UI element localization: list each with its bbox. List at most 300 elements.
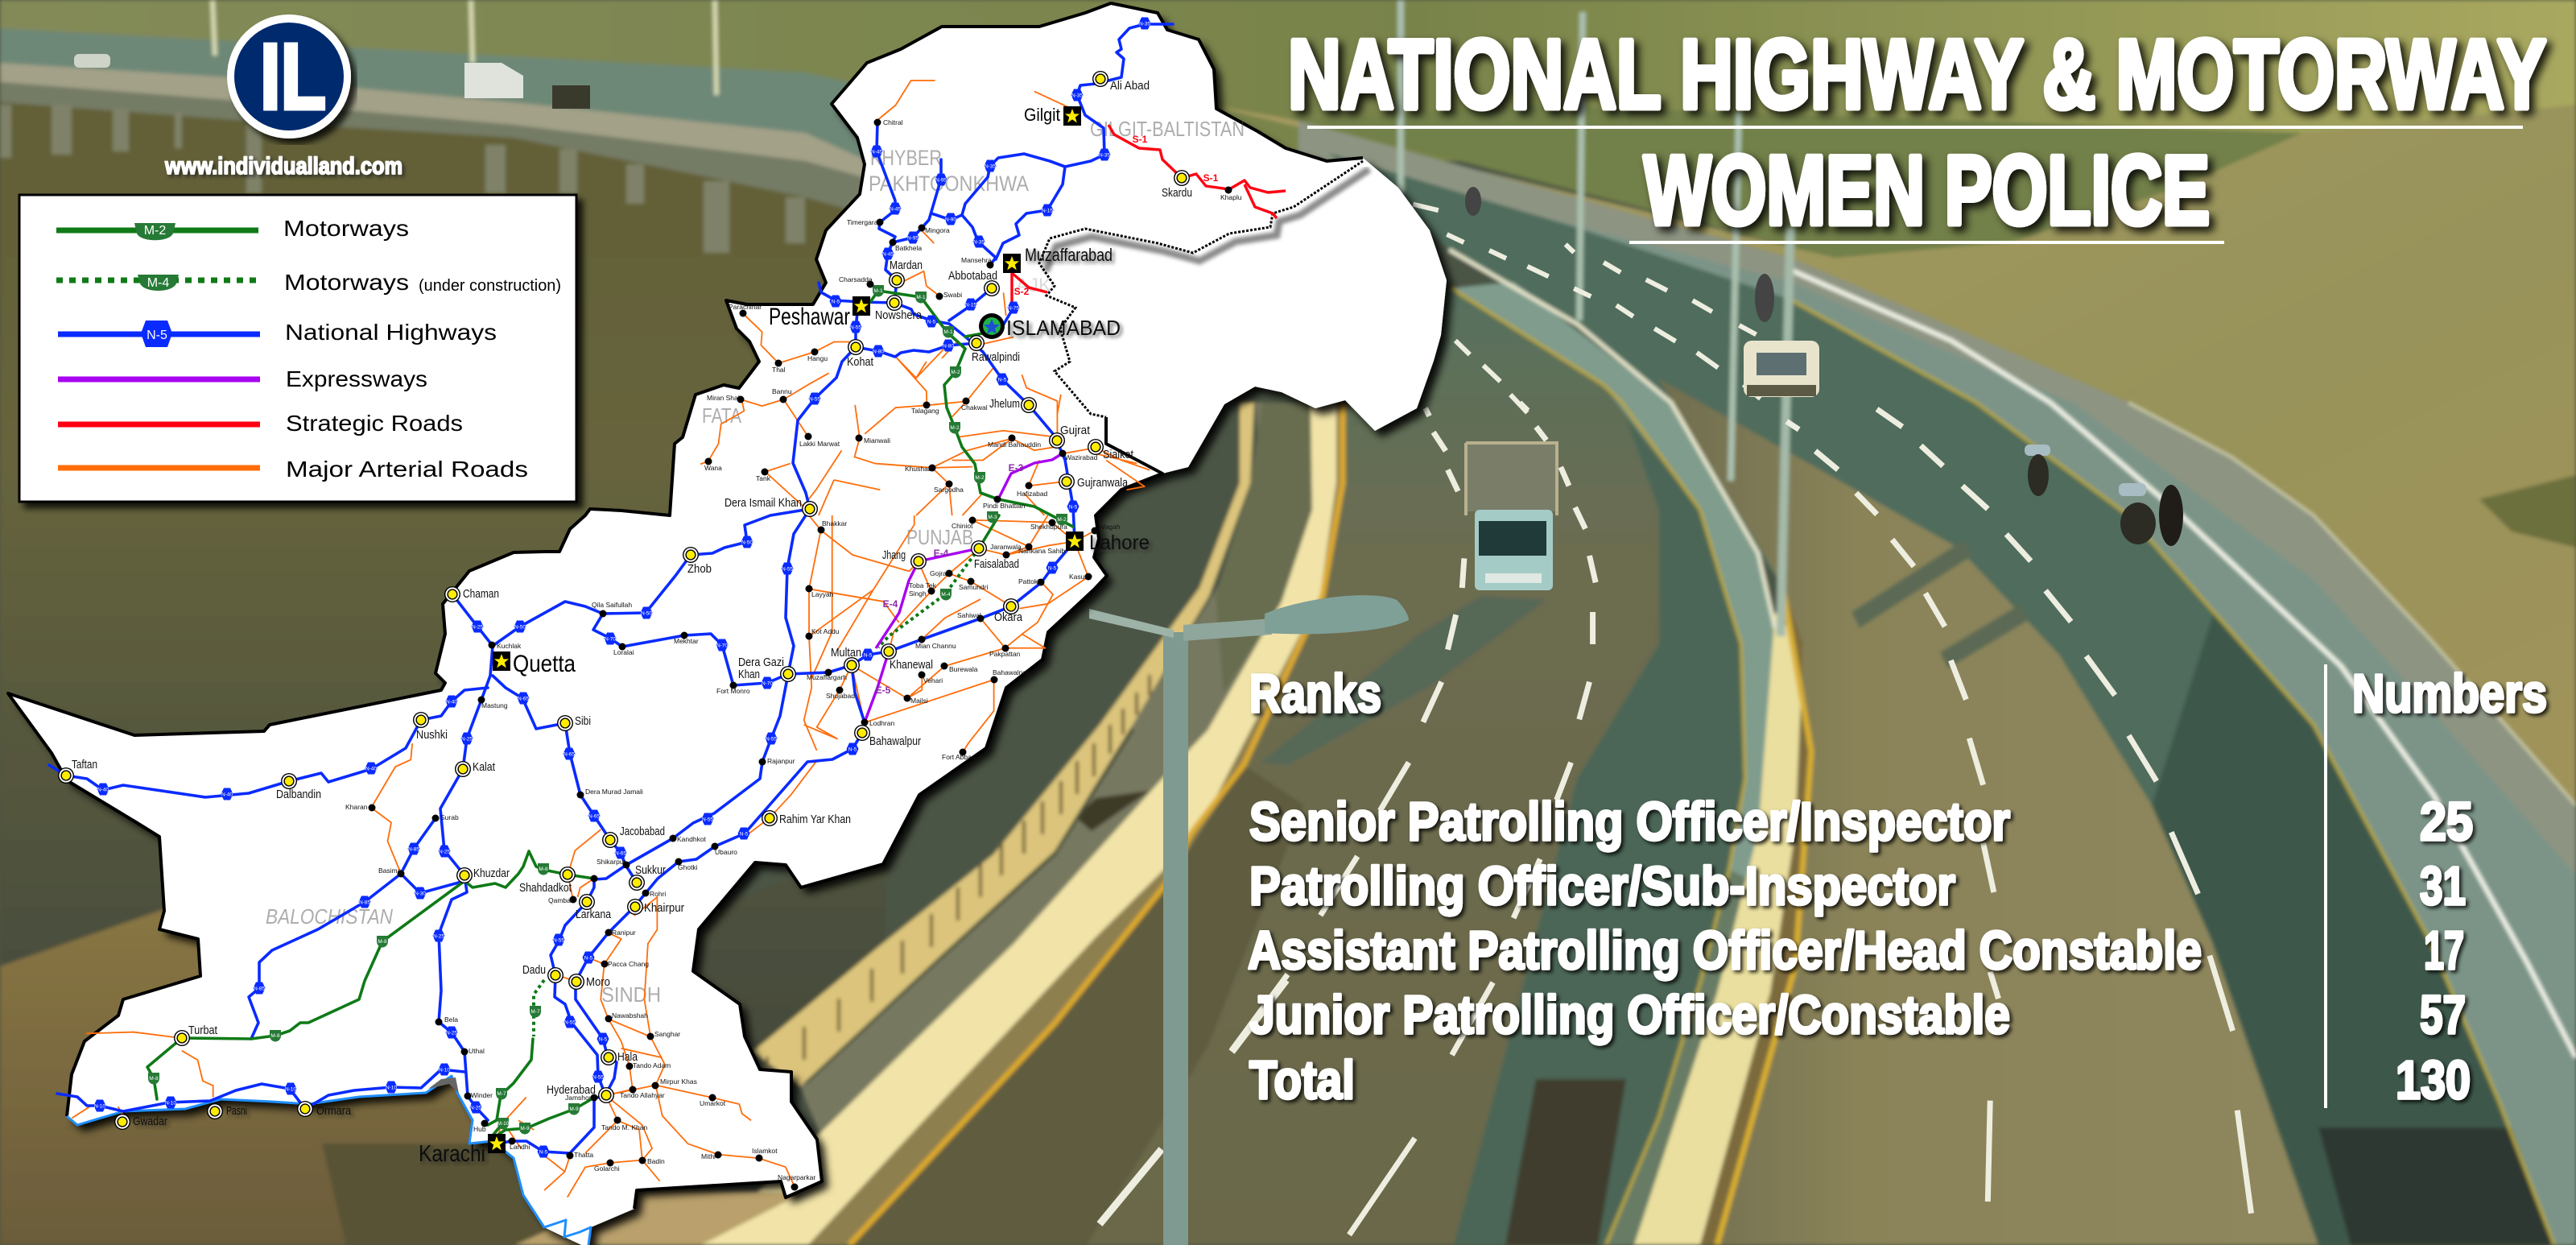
route shields: national highways: N-25 (439, 849, 450, 855)
route shields: motorways: M-9 (569, 1106, 579, 1112)
route shields: motorways: M-9 (520, 1126, 530, 1131)
route shields: motorways: M-2 (950, 425, 960, 431)
route shields: national highways: N-25 (433, 934, 444, 939)
map landmass (8, 3, 1447, 1245)
route shields: national highways: N-15 (965, 303, 976, 308)
small town labels: Tando Adam (633, 1061, 671, 1069)
city labels: Gujrat (1060, 424, 1091, 437)
shaded side of left carriageway (1454, 419, 1745, 1245)
city labels: Rahim Yar Khan (779, 813, 851, 826)
route shields: national highways: N-10 (94, 1103, 105, 1110)
region names: GILGIT-BALTISTAN (1090, 117, 1245, 141)
city labels: Khuzdar (473, 867, 510, 880)
route shields: national highways: N-40 (365, 767, 377, 771)
table rows: numbers: 31 (2420, 856, 2466, 916)
small town labels: Hub (473, 1125, 486, 1133)
route shields: national highways: N-85 (254, 986, 265, 992)
route shields: national highways: N-5 (584, 955, 593, 962)
city labels: Ali Abad (1110, 79, 1150, 93)
region names (266, 117, 1245, 1007)
small town labels: Basima (378, 867, 402, 875)
city labels: Bahawalpur (869, 734, 921, 748)
table rows: ranks (1248, 792, 2202, 1111)
city labels: Abbotabad (948, 269, 997, 283)
route shields: national highways: N-70 (762, 681, 773, 686)
small town labels: Mansehra (961, 256, 992, 264)
route shields: national highways: N-5 (539, 1150, 548, 1155)
legend: strategic roads: Strategic Roads (286, 411, 463, 436)
route shields: national highways: N-50 (514, 625, 526, 630)
sunlit lane (1658, 378, 2318, 1245)
legend: national highways: National Highways (285, 320, 497, 345)
small town labels: Mirpur Khas (660, 1077, 697, 1086)
route shields: national highways: N-65 (518, 696, 529, 702)
map border (8, 3, 1363, 1209)
route shields: national highways: N-5 (599, 1037, 608, 1042)
lower left brown ground (0, 886, 692, 1245)
small town dots (369, 119, 1232, 1190)
route shields: motorways: M-7 (530, 1009, 540, 1015)
city labels: Chaman (463, 587, 499, 601)
route shields: national highways: N-5 (848, 747, 857, 752)
Islamabad marker (979, 313, 1005, 339)
region names: SINDH (601, 982, 661, 1007)
shadowed city labels: Lahore (1089, 532, 1150, 554)
small town labels: Pakpattan (989, 650, 1021, 658)
table rows: ranks: Senior Patrolling Officer/Inspector (1249, 792, 2010, 852)
car (1744, 341, 1819, 397)
route shields: national highways: N-25 (470, 1105, 481, 1111)
dark shaded lane (2152, 612, 2554, 1245)
large city labels: Peshawar (769, 304, 850, 330)
central median (1451, 282, 1782, 886)
region names: FATA (702, 403, 742, 428)
route labels: strategic roads and expressways: S-1 (1203, 172, 1219, 184)
route shields: national highways: N-10 (439, 1068, 450, 1073)
small town labels: Lakki Marwat (799, 440, 840, 448)
small town labels: Hafizabad (1017, 490, 1048, 498)
city labels: Mardan (890, 259, 923, 272)
small town labels: Chiniot (952, 522, 973, 530)
route shields: national highways: N-5 (1069, 504, 1078, 511)
small town labels: Talagang (911, 407, 939, 415)
gulf inlet (428, 1077, 459, 1094)
table rows: ranks: Patrolling Officer/Sub-Inspector (1249, 856, 1955, 916)
small town labels: Tando Allahyar (620, 1091, 665, 1099)
motorways (147, 291, 1073, 1135)
city labels: Jacobabad (620, 825, 665, 838)
small town labels: Tando M. Khan (601, 1123, 647, 1131)
small town labels: Chitral (883, 118, 903, 126)
posted barrier (753, 403, 1254, 1086)
route shields: national highways: N-5 (740, 831, 749, 838)
route shields: national highways: N-90 (945, 217, 956, 222)
city labels: Multan (831, 646, 861, 660)
small town labels: Jamshoro (565, 1094, 596, 1102)
small town labels: Qambar (548, 896, 573, 904)
top right tan hillside (1208, 105, 2576, 805)
shadowed city labels: ISLAMABAD (1006, 316, 1121, 340)
small town labels: Ranipur (612, 929, 636, 937)
route shields: national highways: N-65 (588, 813, 600, 820)
small town labels: Kot Addu (811, 627, 840, 635)
left: olive ground below flyover (0, 81, 886, 1047)
small town labels: Toba Tek (909, 581, 937, 589)
legend: expressways: Expressways (286, 366, 427, 391)
route shields: national highways: N-25 (446, 1031, 457, 1036)
small town labels: Kuchlak (497, 642, 522, 650)
outer fence (1298, 121, 2576, 875)
legend: motorways: M-2 (144, 224, 166, 238)
strategic roads (1012, 125, 1286, 308)
route shields: national highways: N-80 (943, 343, 954, 350)
flyover deck (0, 82, 877, 217)
city labels: Sukkur (635, 863, 666, 877)
small town labels: Vehari (923, 676, 943, 685)
small town labels: Mian Channu (915, 642, 956, 650)
small town labels: Khaplu (1220, 193, 1242, 201)
dotted line of control (1039, 161, 1363, 417)
small town labels: Rajanpur (767, 757, 795, 765)
arterial roads (72, 81, 1150, 1197)
table: ranks and numbers (1248, 664, 2547, 1111)
route shields: national highways: N-55 (850, 325, 861, 330)
small town labels: Samundri (959, 583, 988, 591)
small town labels: Surab (440, 813, 459, 821)
route shields: national highways: N-5 (832, 300, 840, 304)
small town labels: Landhi (510, 1143, 530, 1151)
route shields: national highways: N-10 (386, 1086, 397, 1090)
route shields: national highways: N-50 (641, 610, 652, 617)
table rows: ranks: Assistant Patrolling Officer/Head Constable (1248, 920, 2202, 981)
route shields: national highways: N-35 (1099, 153, 1110, 158)
coastline (67, 1076, 591, 1245)
route shields: motorways: M-1 (916, 295, 926, 300)
city labels: Khairpur (644, 901, 684, 915)
route shields: national highways: N-10 (165, 1100, 176, 1106)
city labels: Okara (994, 610, 1023, 624)
small town labels: Bannu (772, 387, 792, 395)
route shields: national highways: N-35 (1071, 93, 1083, 98)
city labels: Hyderabad (547, 1083, 596, 1097)
route labels: strategic roads and expressways: E-4 (934, 548, 949, 559)
small town labels: Wana (704, 464, 722, 472)
region names: AJK (1016, 275, 1051, 296)
motorcyclists (1465, 187, 2183, 546)
provincial capital markers (488, 106, 1084, 1153)
small town labels: Wazirabad (1065, 453, 1098, 461)
route shields: national highways: N-70 (605, 636, 616, 643)
route labels: strategic roads and expressways: E-4 (883, 598, 898, 610)
table rows: numbers: 130 (2396, 1050, 2471, 1111)
city labels: Skardu (1162, 186, 1192, 200)
small town labels: Parachinar (729, 303, 762, 311)
shadowed city labels: Pasni (226, 1104, 247, 1118)
small town labels: Timergara (847, 218, 878, 226)
small town labels: Kharan (345, 803, 368, 811)
route shields: national highways: N-5 (864, 652, 873, 659)
national highways (49, 24, 1173, 1153)
small town labels: Ubauro (715, 848, 737, 856)
route shields: national highways: N-85 (408, 847, 419, 852)
route shields: national highways: N-80 (873, 350, 884, 354)
city labels: Khanewal (890, 658, 933, 672)
small town labels: Fort Abbas (942, 753, 975, 761)
route labels: strategic roads and expressways: S-2 (1014, 286, 1030, 297)
route shields: motorways: M-8 (378, 939, 387, 945)
small town labels: Islamkot (752, 1147, 778, 1155)
city labels: Faisalabad (974, 557, 1019, 571)
route shields: motorways: M-10 (497, 1121, 510, 1127)
route labels: strategic roads and expressways: E-5 (876, 685, 891, 696)
route shields: national highways: N-40 (446, 699, 457, 705)
route shields: national highways: N-75 (1008, 306, 1019, 311)
route shields: national highways (93, 18, 1151, 1158)
shadowed city labels: Gwadar (133, 1115, 167, 1128)
small town labels: Shekhupura (1030, 523, 1067, 531)
small town labels: Mastung (481, 701, 508, 709)
route shields: national highways: N-55 (592, 1074, 604, 1081)
city labels: Zhob (687, 562, 712, 576)
small town labels: Wagah (1099, 523, 1121, 531)
route shields: national highways: N-35 (973, 240, 985, 245)
city labels: Moro (586, 975, 610, 989)
route labels: strategic roads and expressways: E-3 (1009, 462, 1024, 474)
city labels: Nushki (416, 728, 448, 742)
city labels: Sialkot (1103, 448, 1134, 461)
major city markers (58, 71, 1190, 1130)
small town labels: Kasur (1069, 573, 1087, 581)
flyover railing (0, 63, 877, 181)
small town labels: Pattoki (1018, 577, 1039, 585)
city labels: Khan (738, 668, 760, 681)
small town labels: Gojra (930, 569, 947, 577)
outer wall (1298, 121, 2576, 1245)
legend: motorways under construction: M-4 (147, 276, 169, 290)
route shields: national highways: N-95 (907, 235, 919, 242)
small town labels (345, 118, 1242, 1181)
route shields: national highways: N-40 (221, 792, 233, 797)
route shields: motorways: M-8 (149, 1076, 159, 1082)
route shields: national highways: N-55 (766, 736, 777, 742)
cream barrier (701, 403, 1336, 1245)
table rows: numbers: 57 (2420, 985, 2466, 1045)
city labels: Nowshera (875, 308, 923, 322)
route shields: national highways: N-25 (472, 625, 483, 630)
route shields: motorways: M-8 (270, 1033, 280, 1039)
route shields: national highways: N-25 (461, 736, 473, 742)
route shields: national highways: N-30 (415, 891, 426, 897)
hillside grass top (0, 0, 2576, 161)
small town labels: Sanghar (654, 1030, 680, 1038)
route shields: national highways: N-5 (998, 377, 1007, 383)
small town labels: Batkhela (895, 244, 922, 252)
small town labels: Pindi Bhattian (983, 502, 1026, 510)
route shields: national highways: N-35 (1139, 21, 1150, 27)
small town labels: Burewala (949, 665, 978, 673)
small town labels: Khushab (905, 465, 932, 473)
route shields: national highways: N-40 (97, 788, 109, 792)
shadowed city labels: Muzaffarabad (1025, 245, 1113, 265)
route shields: national highways: N-85 (359, 900, 370, 905)
gap beneath posted barrier (800, 403, 1312, 1133)
table rows: numbers: 17 (2424, 920, 2464, 981)
city labels: Gujranwala (1077, 476, 1129, 490)
legend: national highways: N-5 (147, 329, 167, 342)
route shields: national highways: N-45 (890, 206, 901, 213)
small town labels: Fort Monro (716, 687, 750, 695)
route shields: national highways: N-55 (564, 1020, 576, 1026)
route shields: national highways: N-50 (741, 540, 753, 546)
website address: www.individualland.com (164, 153, 402, 180)
thin light poles (1401, 0, 1739, 481)
legend: motorways (56, 216, 409, 241)
route shields: motorways: M-1 (873, 288, 883, 294)
route shields: motorways: M-4 (941, 592, 951, 598)
route shields: national highways: N-15 (1042, 208, 1053, 214)
large city labels (513, 105, 1060, 677)
small town labels: Layyah (811, 590, 834, 598)
route shields: motorways (148, 285, 1067, 1134)
lane shadows (1852, 540, 2029, 668)
city labels: Larkana (576, 908, 612, 921)
small town labels: Ghotki (678, 863, 698, 871)
small town labels: Charsadda (839, 275, 873, 283)
small town labels: Pacca Chang (608, 960, 649, 968)
table header: Ranks (1249, 664, 1381, 724)
city labels (72, 79, 1192, 1097)
route shields: national highways: N-5 (1048, 565, 1057, 572)
small town labels: Golarchi (594, 1164, 620, 1173)
large city labels: Gilgit (1024, 105, 1060, 125)
legend: motorways under construction: Motorways (284, 270, 409, 295)
small town labels: Nankana Sahib (1018, 547, 1065, 555)
legend: major arterial roads: Major Arterial Roads (286, 457, 528, 482)
small town labels: Loralai (613, 648, 634, 656)
right asphalt near cream barrier (849, 765, 1304, 1245)
city labels: Kalat (473, 760, 496, 774)
legend: motorways under construction (56, 270, 561, 295)
route shields: national highways: N-55 (702, 817, 713, 823)
route shields: national highways: N-5 (927, 319, 936, 325)
small town labels: Mingora (925, 226, 950, 234)
small town labels: Miran Shah (707, 394, 742, 402)
small town labels: Bhakkar (822, 519, 847, 527)
city labels: Shahdadkot (519, 881, 572, 895)
small town labels: Thatta (574, 1151, 593, 1159)
route shields: motorways: M-2 (951, 370, 960, 375)
large city labels: Quetta (513, 651, 576, 677)
table rows: ranks: Total (1249, 1050, 1355, 1111)
flyover pillars (0, 105, 805, 253)
legend: national highways (58, 320, 497, 347)
city labels: Turbat (188, 1024, 218, 1037)
small town labels: Thal (772, 366, 786, 374)
table header (1249, 664, 2547, 724)
city labels: Taftan (72, 758, 97, 771)
route shields: motorways: M-2 (975, 475, 985, 481)
shadowed city labels: Ormara (316, 1104, 352, 1118)
lane dashes (1100, 205, 2252, 1235)
small town labels: Mandi Bahauddin (988, 441, 1041, 449)
small town labels: Sahiwal (957, 611, 981, 619)
table rows: numbers: 25 (2420, 792, 2473, 852)
small town labels: Chakwal (961, 403, 988, 412)
small town labels: Jaranwala (990, 543, 1022, 551)
legend: motorways under construction: (under construction) (419, 277, 561, 295)
city labels: Dalbandin (276, 788, 321, 801)
route shields: national highways: N-70 (716, 643, 728, 649)
title (1288, 19, 2546, 245)
logo: Individualland (227, 14, 351, 139)
region names: KHYBER (870, 146, 942, 170)
route labels: strategic roads and expressways: S-1 (1133, 134, 1148, 145)
small town labels: Kandhkot (677, 835, 707, 843)
truck (1466, 443, 1557, 590)
left carriageway (849, 282, 1745, 1245)
city labels: Kohat (847, 355, 874, 369)
small town labels: Sargodha (934, 486, 964, 494)
small town labels: Nawabshah (612, 1011, 648, 1020)
small town labels: Mithi (701, 1152, 716, 1160)
city labels: Rawalpindi (972, 350, 1020, 364)
small town labels: Nagarparkar (778, 1173, 815, 1181)
small town labels: Singh (909, 589, 927, 598)
right carriageway (1328, 153, 2554, 1245)
route shields: national highways: N-55 (809, 396, 820, 403)
expressways (865, 453, 1063, 722)
route shields: national highways: N-65 (564, 752, 575, 757)
median cream strip (1634, 612, 1803, 1245)
road edge lines (1790, 300, 2554, 1245)
small town labels: Swabi (943, 291, 962, 299)
city labels: Jhelum (989, 397, 1020, 411)
city labels: Dera Ismail Khan (724, 496, 802, 510)
flyover vehicles (74, 54, 590, 109)
small town labels: Winder (471, 1091, 493, 1099)
logo: Individualland: IL (260, 24, 326, 129)
lamp post (1089, 595, 1409, 1245)
flyover road (0, 28, 877, 177)
shadowed city labels (133, 245, 1150, 1167)
city labels: Hala (617, 1050, 638, 1064)
dark ground between map and barrier (692, 346, 1256, 918)
route labels: strategic roads and expressways (876, 134, 1219, 696)
route shields: motorways: M-3 (988, 515, 997, 520)
route shields: motorways: M-1 (943, 329, 953, 335)
region names: PUNJAB (906, 525, 973, 549)
small town labels: Shujabad (826, 692, 855, 700)
small town labels: Tank (756, 474, 771, 482)
dotted line of control shadow (1046, 169, 1369, 271)
small town labels: Qila Saifullah (592, 601, 632, 609)
route shields: national highways: N-55 (553, 937, 564, 944)
region names: BALOCHISTAN (266, 904, 393, 929)
city labels: Jhang (882, 548, 906, 562)
route shields: national highways: N-45 (871, 150, 882, 155)
city labels: Dadu (522, 963, 546, 977)
legend panel (19, 195, 576, 502)
grass band (1304, 105, 2302, 258)
small town labels: Umarkot (700, 1099, 726, 1107)
route shields: national highways: N-45 (882, 251, 894, 258)
small town labels: Muzaffargarh (807, 673, 847, 681)
small town labels: Hangu (807, 354, 828, 362)
small town labels: Dera Murad Jamali (585, 788, 643, 796)
small town labels: Bahawalnagar (993, 668, 1037, 676)
table rows: numbers (2396, 792, 2473, 1111)
small town labels: Badin (647, 1157, 665, 1165)
